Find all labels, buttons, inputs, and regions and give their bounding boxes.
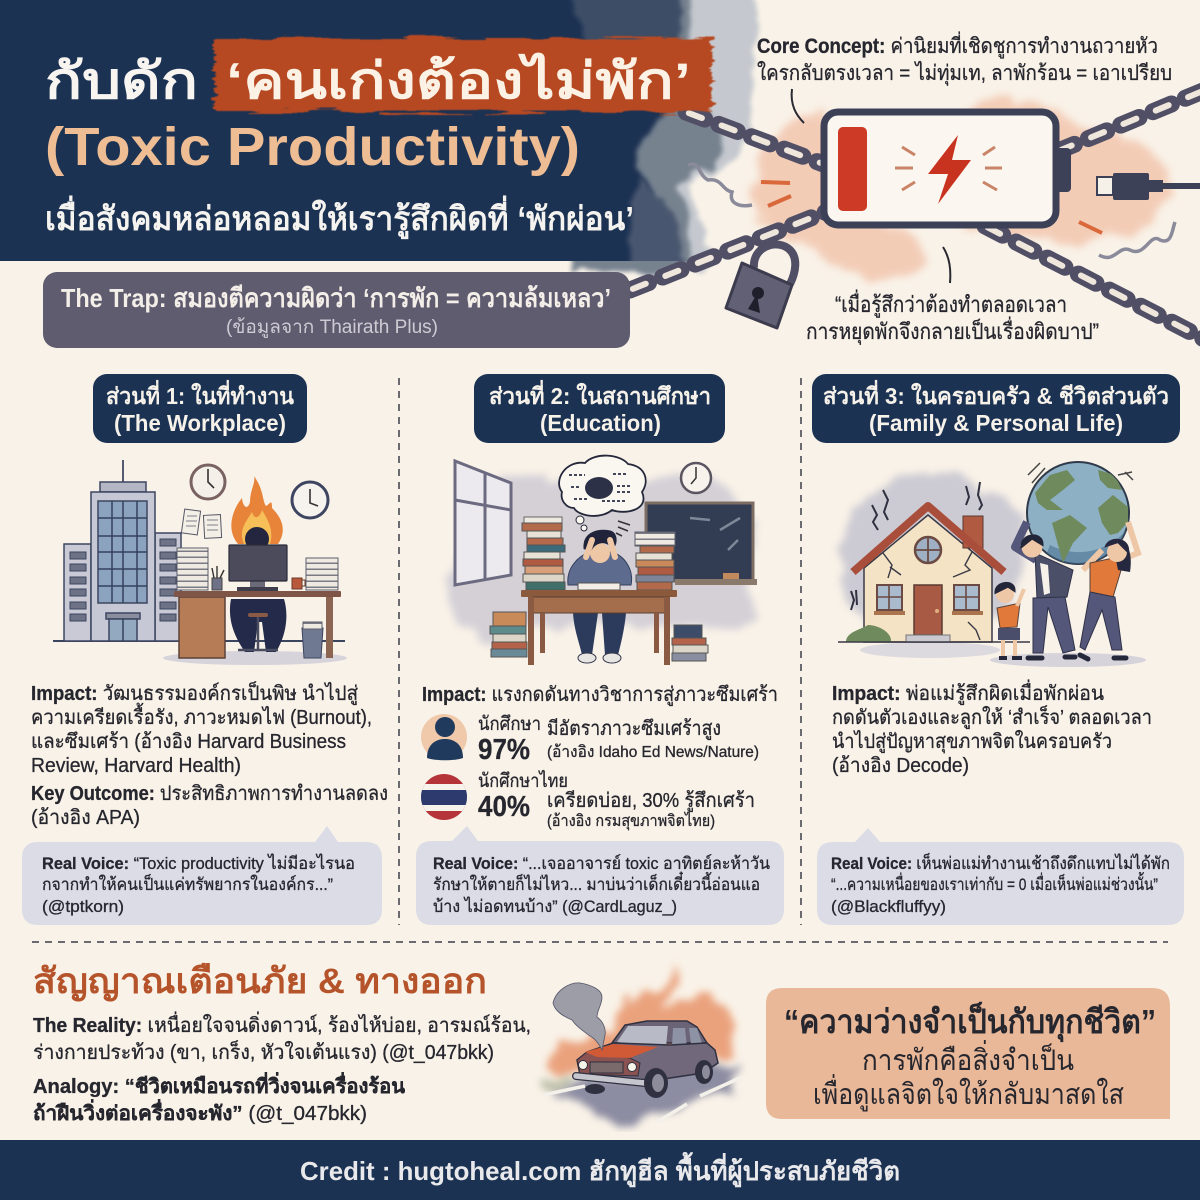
section heading 1: (The Workplace) [114,410,286,436]
father [1015,522,1075,658]
wall clocks [191,465,328,518]
pinned papers [181,509,222,538]
title: (Toxic Productivity) [45,117,580,177]
illustration: overheating car [540,964,742,1122]
warning signs text: ร่างกายประท้วง (ขา, เกร็ง, หัวใจเต้นแรง) (@t_047bkk) [33,1039,494,1064]
column 3: real voice bubble: Real Voice: เห็นพ่อแม่ทำงานเช้าถึงดึกแทบไม่ได้พัก [831,852,1170,873]
icon: student [421,714,467,760]
column 1: impact text [31,680,388,829]
section heading 3: ส่วนที่ 3: ในครอบครัว & ชีวิตส่วนตัว [823,379,1169,409]
divider lines [32,378,1168,942]
stat: thai students 40%: 40% [478,791,530,823]
stress squiggles [851,482,982,610]
column 3: impact text: กดดันตัวเองและลูกให้ ‘สำเร็จ’ ตลอดเวลา [832,704,1152,730]
warning signs text: ถ้าฝืนวิ่งต่อเครื่องจะพัง” (@t_047bkk) [33,1098,367,1125]
stat: students 97% [421,714,759,766]
classroom clock [681,463,711,493]
quote text [806,289,1099,345]
column 1: impact text: และซึมเศร้า (อ้างอิง Harvard Business [31,731,346,753]
section heading 2: ส่วนที่ 2: ในสถานศึกษา [489,379,711,409]
column 2: real voice bubble [416,826,784,925]
storm cloud wash [838,469,1024,625]
battery body [824,112,1071,225]
floor book stack left [490,612,527,657]
desk [174,591,341,658]
classroom wall wash [449,470,752,645]
column 1: impact text: ความเครียดเรื้อรัง, ภาวะหมดไฟ (Burnout), [31,703,372,729]
panel: key message [766,988,1170,1119]
book stack right [635,532,675,590]
panel: the trap: The Trap: สมองตีความผิดว่า ‘การพัก = ความล้มเหลว’ [61,283,611,313]
column 3: impact text [832,679,1152,777]
panel: key message: “ความว่างจำเป็นกับทุกชีวิต” [784,1001,1156,1043]
globe [1027,462,1133,570]
stressed student [568,531,632,663]
footer credit [0,1140,1200,1200]
squiggle lines [688,164,752,206]
title: ‘คนเก่งต้องไม่พัก’ [226,52,691,109]
computer monitor [229,545,287,591]
flames [231,476,283,544]
column 3: impact text: นำไปสู่ปัญหาสุขภาพจิตในครอบครัว [832,730,1112,754]
panel: key message: การพักคือสิ่งจำเป็น [862,1040,1074,1077]
paper stacks and mug [177,548,338,590]
footer credit: Credit : hugtoheal.com ฮักทูฮีล พื้นที่ผู้ประสบภัยชีวิต [300,1151,900,1188]
window [455,461,511,585]
section heading 2 [474,374,725,443]
leader line: quote [943,247,950,283]
thought bubble with brain [559,456,646,536]
column 3: impact text: (อ้างอิง Decode) [832,755,969,777]
quote text: การหยุดพักจึงกลายเป็นเรื่องผิดบาป” [806,316,1099,345]
chain: bottom right [985,226,1200,342]
column 1: impact text: Review, Harvard Health) [31,755,241,777]
core concept text [757,31,1172,86]
title [45,38,712,240]
stat: thai students 40%: นักศึกษาไทย [478,770,568,792]
section heading 1: ส่วนที่ 1: ในที่ทำงาน [106,379,294,409]
title: กับดัก [45,53,198,109]
heading: warning signs and way out: สัญญาณเตือนภัย & ทางออก [33,962,487,1002]
illustration: workplace burnout [53,460,347,665]
peach wash behind battery [752,110,925,278]
column 3: real voice bubble: (@Blackfluffyy) [831,897,946,916]
stat: students 97%: นักศึกษา [478,714,541,735]
padlock [726,244,795,328]
column 3: impact text: Impact: พ่อแม่รู้สึกผิดเมื่อพักผ่อน [832,679,1104,706]
panel: key message: เพื่อดูแลจิตใจให้กลับมาสดใส [813,1074,1124,1112]
header banner [0,0,756,300]
section heading 3: (Family & Personal Life) [869,410,1123,436]
stat: thai students 40%: (อ้างอิง กรมสุขภาพจิตไทย) [547,811,715,831]
unplugged charger [1097,173,1200,200]
column 1: impact text: Impact: วัฒนธรรมองค์กรเป็นพิษ นำไปสู่ [31,680,358,706]
chalkboard [646,503,757,585]
icon: thai flag [420,774,468,820]
orange spark marks [761,182,1102,233]
leader line: core concept [792,89,804,123]
panel: the trap [43,272,630,348]
core concept text: Core Concept: ค่านิยมที่เชิดชูการทำงานถวายหัว [757,31,1158,59]
column 1: impact text: Key Outcome: ประสิทธิภาพการทำงานลดลง [31,783,388,805]
column 2: real voice bubble: รักษาให้ตายก็ไม่ไหว... มาบ่นว่าเด็กเดี๋ยวนี้อ่อนแอ [433,871,760,894]
illustration: chained battery [630,88,1200,342]
section heading 2: (Education) [540,410,661,436]
burnt out worker [230,527,286,652]
column 1: impact text: (อ้างอิง APA) [31,807,140,829]
illustration: education stress [449,456,757,665]
section heading 1 [93,374,307,443]
mother [1080,522,1138,659]
column 1: real voice bubble: กจากทำให้คนเป็นแค่ทรัพยากรในองค์กร...” [42,873,333,894]
waste bin [302,622,323,658]
column 2: real voice bubble: Real Voice: “...เจออาจารย์ toxic อาทิตย์ละห้าวัน [433,854,770,873]
book stack left [522,517,565,590]
school desk [521,590,677,665]
panel: the trap: (ข้อมูลจาก Thairath Plus) [226,317,438,338]
illustration: family pressure [838,462,1146,667]
chain: bottom left [630,212,826,290]
title: เมื่อสังคมหล่อหลอมให้เรารู้สึกผิดที่ ‘พักผ่อน’ [45,195,634,240]
grass verge [540,1072,575,1092]
stat: thai students 40%: เครียดบ่อย, 30% รู้สึกเศร้า [547,790,755,813]
chain: top left [686,112,826,165]
chain: top right [1056,88,1200,152]
column 1: real voice bubble: Real Voice: “Toxic productivity ไม่มีอะไรนอ [42,853,355,873]
stat: students 97%: มีอัตราภาวะซึมเศร้าสูง [547,718,721,741]
smoke [553,983,605,1050]
fire wash [550,964,732,1072]
child [996,583,1024,658]
car [576,1021,718,1098]
warning signs text: Analogy: “ชีวิตเหมือนรถที่วิ่งจนเครื่องร้อน [33,1071,405,1098]
column 1: real voice bubble: (@tptkorn) [42,897,124,916]
column 2: impact text: Impact: แรงกดดันทางวิชาการสู่ภาวะซึมเศร้า [422,684,778,707]
stat: thai students 40% [420,770,755,831]
stat: students 97%: (อ้างอิง Idaho Ed News/Nature) [547,743,759,761]
section heading 3 [812,374,1180,443]
house [838,506,1030,642]
brush highlight [214,38,712,112]
office building [64,460,181,641]
warning signs text: The Reality: เหนื่อยใจจนดิ่งดาวน์, ร้องไห้บ่อย, อารมณ์ร้อน, [33,1011,531,1037]
column 2: real voice bubble: บ้าง ไม่อดทนบ้าง” (@CardLaguz_) [433,896,677,916]
column 1: real voice bubble [22,826,382,925]
quote text: “เมื่อรู้สึกว่าต้องทำตลอดเวลา [835,289,1067,318]
floor book stack right [672,625,708,661]
column 3: real voice bubble [817,828,1184,925]
warning signs text [33,1011,531,1125]
stat: students 97%: 97% [478,734,530,766]
road [548,1062,738,1120]
